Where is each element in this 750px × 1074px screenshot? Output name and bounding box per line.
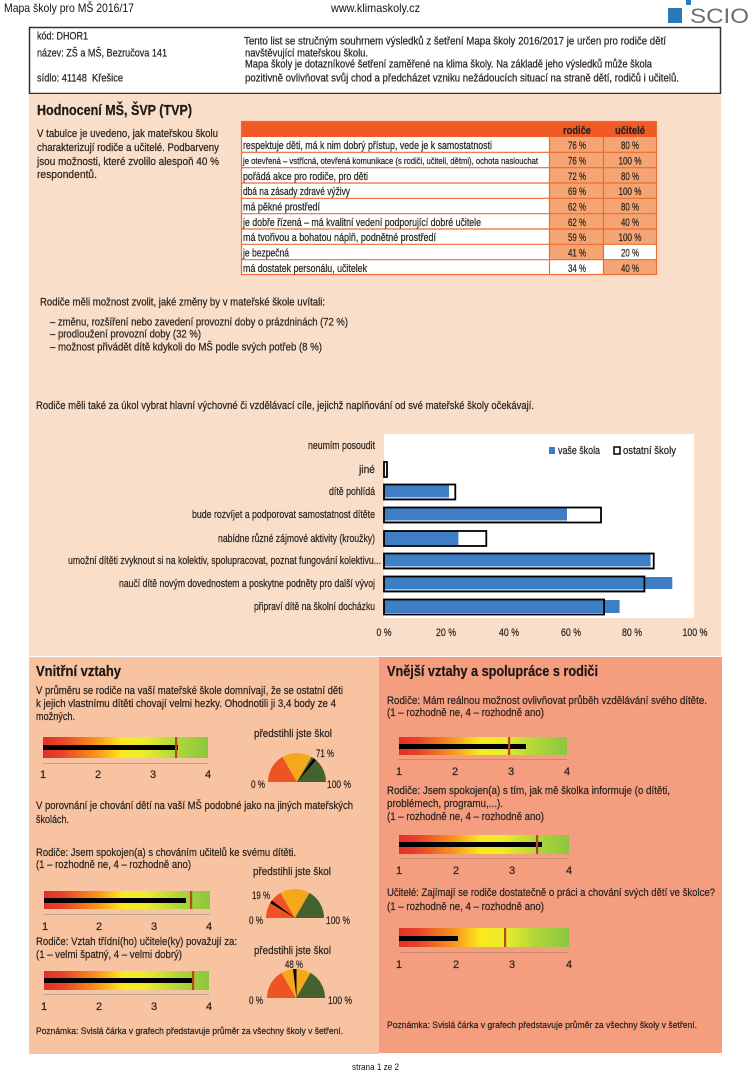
bullet chart: information: 4 xyxy=(566,865,572,877)
gauge: 71 %: předstihli jste škol xyxy=(254,728,332,740)
bullet chart: children's behaviour: 3 xyxy=(150,769,156,781)
bullet chart: teacher behaviour xyxy=(42,891,212,933)
bullet chart: class teacher: 1 xyxy=(41,1001,47,1013)
table: characteristics of the kindergarten: respektuje děti, má k nim dobrý přístup, vede je k samostatnosti xyxy=(243,140,492,152)
table: characteristics of the kindergarten: 80 % xyxy=(621,140,639,152)
gauge: 48 %: 0 % xyxy=(249,995,263,1007)
table: characteristics of the kindergarten: 80 % xyxy=(621,202,639,214)
gauge: 19 %: 100 % xyxy=(326,915,350,927)
table: characteristics of the kindergarten: 34 % xyxy=(568,263,586,275)
text: teachers' question: (1 – rozhodně ne, 4 – rozhodně ano) xyxy=(387,901,544,913)
note: right panel: Poznámka: Svislá čárka v grafech představuje průměr za všechny školy v šetření. xyxy=(387,1020,697,1031)
table: characteristics of the kindergarten: učitelé xyxy=(615,125,645,137)
text: behaviour comparison: školách. xyxy=(36,814,69,826)
text: desired changes: – změnu, rozšíření nebo zavedení provozní doby o prázdninách (72 %) xyxy=(50,316,348,328)
table: characteristics of the kindergarten: má tvořivou a bohatou náplň, podnětné prostředí xyxy=(243,232,436,244)
gauge: 71 %: 0 % xyxy=(251,779,265,791)
bullet chart: information: 2 xyxy=(453,865,459,877)
text: question on teacher behaviour: (1 – rozhodně ne, 4 – rozhodně ano) xyxy=(36,859,191,871)
chart bars: your school xyxy=(384,485,672,613)
gauge: 48 %: 48 % xyxy=(285,959,303,971)
chart category labels: naučí dítě novým dovednostem a poskytne podněty pro další vývoj xyxy=(119,578,375,590)
text: desired changes: – prodloužení provozní doby (32 %) xyxy=(50,328,201,340)
table: characteristics of the kindergarten: 20 % xyxy=(621,248,639,260)
text: desired changes xyxy=(40,296,348,354)
bullet chart: parents' interest: 3 xyxy=(509,959,515,971)
bullet chart: information: 1 xyxy=(396,865,402,877)
text: summary of children's behaviour: k jejich vlastnímu dítěti chovají velmi hezky. Ohodnotili ji 3,4 body ze 4 xyxy=(36,698,336,710)
text: question on information xyxy=(387,785,670,823)
bullet chart: influence: 3 xyxy=(508,766,514,778)
heading: Vnitřní vztahy: Vnitřní vztahy xyxy=(36,663,122,680)
table: characteristics of the kindergarten: 100 % xyxy=(618,186,642,198)
bullet chart: influence xyxy=(396,737,570,778)
text: summary of children's behaviour xyxy=(36,685,343,723)
bullet chart: class teacher xyxy=(41,971,212,1013)
table: characteristics of the kindergarten xyxy=(241,121,657,275)
introductory text: Tento list se stručným souhrnem výsledků z šetření Mapa školy 2016/2017 je určen pro rodiče dětí xyxy=(244,36,666,48)
introductory text xyxy=(244,36,679,84)
chart category labels: dítě pohlídá xyxy=(329,486,376,498)
panel: school information box xyxy=(30,28,720,94)
text: table description xyxy=(36,128,219,181)
table: characteristics of the kindergarten: je dobře řízená – má kvalitní vedení podporující dobré učitele xyxy=(242,217,481,229)
table: characteristics of the kindergarten: má pěkné prostředí xyxy=(243,202,320,214)
text: question on class teacher: Rodiče: Vztah třídní(ho) učitele(ky) považují za: xyxy=(36,936,237,948)
gauge: 19 % xyxy=(249,866,350,927)
chart axis labels: 40 % xyxy=(499,627,519,639)
table: characteristics of the kindergarten: 76 % xyxy=(568,156,586,168)
table: characteristics of the kindergarten: 80 % xyxy=(621,171,639,183)
bullet chart: children's behaviour: 1 xyxy=(40,769,46,781)
footer: page number: strana 1 ze 2 xyxy=(352,1062,399,1072)
panel: external relationships xyxy=(379,657,722,1053)
chart axis labels: 20 % xyxy=(436,627,456,639)
table: characteristics of the kindergarten: 76 % xyxy=(568,140,586,152)
text: question on influence: (1 – rozhodně ne, 4 – rozhodně ano) xyxy=(387,707,544,719)
text: teachers' question xyxy=(387,887,715,913)
panel: internal relationships xyxy=(29,657,379,1054)
header: document title: Mapa školy pro MŠ 2016/17 xyxy=(4,0,134,15)
table: characteristics of the kindergarten: dbá na zásady zdravé výživy xyxy=(243,186,350,198)
heading: Vnější vztahy: Vnější vztahy a spolupráce s rodiči xyxy=(387,663,598,680)
text: desired changes: Rodiče měli možnost zvolit, jaké změny by v mateřské škole uvítali: xyxy=(40,296,325,308)
bullet chart: information: 3 xyxy=(509,865,515,877)
text: question on teacher behaviour: Rodiče: Jsem spokojen(a) s chováním učitelů ke svému dítěti. xyxy=(36,847,296,859)
text: question on information: (1 – rozhodně ne, 4 – rozhodně ano) xyxy=(387,811,544,823)
chart category labels: bude rozvíjet a podporovat samostatnost dítěte xyxy=(192,509,375,521)
text: question on teacher behaviour xyxy=(36,847,296,871)
table: characteristics of the kindergarten: 41 % xyxy=(568,248,586,260)
chart axis labels: 60 % xyxy=(561,627,581,639)
bullet chart: teacher behaviour: 2 xyxy=(96,921,102,933)
table: characteristics of the kindergarten: pořádá akce pro rodiče, pro děti xyxy=(243,171,368,183)
chart bars: other schools xyxy=(384,462,654,614)
text: table description: jsou možnosti, které zvolilo alespoň 40 % xyxy=(36,156,219,168)
school identification: sídlo: 41148 Křešice xyxy=(37,72,123,84)
bullet chart: parents' interest: 2 xyxy=(453,959,459,971)
introductory text: pozitivně ovlivňovat svůj chod a předcházet vzniku nežádoucích situací na straně dětí, rodičů i učitelů. xyxy=(245,72,679,84)
text: question on influence xyxy=(387,695,707,719)
bar chart: educational goals xyxy=(68,434,708,639)
table: characteristics of the kindergarten: je bezpečná xyxy=(242,248,290,260)
text: table description: charakterizují rodiče a učitelé. Podbarveny xyxy=(37,142,219,154)
introductory text: Mapa školy je dotazníkové šetření zaměřené na klima školy. Na základě jeho výsledků může škola xyxy=(245,58,653,70)
bullet chart: teacher behaviour: 4 xyxy=(206,921,212,933)
bullet chart: teacher behaviour: 1 xyxy=(42,921,48,933)
icon: SCIO logo xyxy=(668,0,749,28)
text: desired changes: – možnost přivádět dítě kdykoli do MŠ podle svých potřeb (8 %) xyxy=(50,340,322,354)
gauge: 48 % xyxy=(249,945,352,1007)
chart category labels: umožní dítěti zvyknout si na kolektiv, spolupracovat, poznat fungování kolektivu... xyxy=(68,555,381,567)
table: characteristics of the kindergarten: 40 % xyxy=(621,217,639,229)
table: characteristics of the kindergarten: rodiče xyxy=(563,125,591,137)
text: chart intro: Rodiče měli také za úkol vybrat hlavní výchovné či vzdělávací cíle, jejichž naplňování od své mateřské školy očekávají. xyxy=(36,400,534,412)
gauge: 71 %: 100 % xyxy=(327,779,351,791)
bullet chart: teacher behaviour: 3 xyxy=(151,921,157,933)
bullet chart: information xyxy=(396,835,572,877)
school identification: název: ZŠ a MŠ, Bezručova 141 xyxy=(37,46,167,60)
text: behaviour comparison xyxy=(36,799,353,826)
bullet chart: influence: 4 xyxy=(564,766,570,778)
table: characteristics of the kindergarten: 69 % xyxy=(568,186,586,198)
bullet chart: class teacher: 4 xyxy=(206,1001,212,1013)
table: characteristics of the kindergarten: 72 % xyxy=(568,171,586,183)
panel: evaluation of kindergarten xyxy=(29,94,721,656)
gauge: 19 %: 0 % xyxy=(249,915,263,927)
gauge: 48 %: 100 % xyxy=(328,995,352,1007)
bullet chart: influence: 1 xyxy=(396,766,402,778)
heading: Hodnocení MŠ: Hodnocení MŠ, ŠVP (TVP) xyxy=(37,101,192,119)
table: characteristics of the kindergarten: má dostatek personálu, učitelek xyxy=(243,263,367,275)
chart axis labels xyxy=(376,627,708,639)
gauge: 19 %: předstihli jste škol xyxy=(253,866,331,878)
chart category labels: nabídne různé zájmové aktivity (kroužky) xyxy=(218,533,375,545)
chart axis labels: 0 % xyxy=(376,627,392,639)
chart legend xyxy=(549,445,676,457)
bullet chart: parents' interest: 4 xyxy=(566,959,572,971)
gauge: 71 %: 71 % xyxy=(316,748,334,760)
chart axis labels: 80 % xyxy=(622,627,642,639)
chart axis labels: 100 % xyxy=(682,627,708,639)
table: characteristics of the kindergarten: 59 % xyxy=(568,232,586,244)
table: characteristics of the kindergarten: 62 % xyxy=(568,202,586,214)
text: summary of children's behaviour: možných. xyxy=(36,711,75,723)
header: website: www.klimaskoly.cz xyxy=(330,1,420,15)
bullet chart: children's behaviour xyxy=(40,737,211,781)
gauge: 71 % xyxy=(251,728,351,791)
bullet chart: influence: 2 xyxy=(452,766,458,778)
icon: SCIO logo: SCIO xyxy=(690,5,749,28)
text: summary of children's behaviour: V průměru se rodiče na vaší mateřské škole domnívají, že se ostatní děti xyxy=(36,685,343,697)
chart category labels: připraví dítě na školní docházku xyxy=(254,601,375,613)
text: table description: respondentů. xyxy=(37,169,97,181)
text: question on class teacher xyxy=(36,936,237,961)
gauge: 48 %: předstihli jste škol xyxy=(254,945,331,957)
table: characteristics of the kindergarten: 40 % xyxy=(621,263,639,275)
text: behaviour comparison: V porovnání je chování dětí na vaší MŠ podobné jako na jiných mateřských xyxy=(36,799,353,812)
note: left panel: Poznámka: Svislá čárka v grafech představuje průměr za všechny školy v šetření. xyxy=(36,1026,343,1037)
chart legend: ostatní školy xyxy=(623,445,676,457)
text: question on information: problémech, programu,...). xyxy=(387,798,503,810)
chart category labels: neumím posoudit xyxy=(308,440,375,452)
bullet chart: children's behaviour: 2 xyxy=(95,769,101,781)
bullet chart: class teacher: 2 xyxy=(96,1001,102,1013)
school identification xyxy=(37,30,167,84)
gauge: 19 %: 19 % xyxy=(252,890,270,902)
table: characteristics of the kindergarten: 100 % xyxy=(618,156,642,168)
bullet chart: parents' interest xyxy=(396,928,572,971)
table: characteristics of the kindergarten: 100 % xyxy=(618,232,642,244)
introductory text: navštěvující mateřskou školu. xyxy=(245,48,368,60)
chart category labels: jiné xyxy=(358,464,375,476)
chart category labels xyxy=(68,440,381,613)
bullet chart: parents' interest: 1 xyxy=(396,959,402,971)
bullet chart: children's behaviour: 4 xyxy=(205,769,211,781)
table: characteristics of the kindergarten: 62 % xyxy=(568,217,586,229)
bullet chart: class teacher: 3 xyxy=(151,1001,157,1013)
school identification: kód: DHOR1 xyxy=(37,30,88,42)
table: characteristics of the kindergarten: je otevřená – vstřícná, otevřená komunikace (s rodiči, učiteli, dětmi), ochota naslouchat xyxy=(242,156,538,167)
text: question on information: Rodiče: Jsem spokojen(a) s tím, jak mě školka informuje (o dítěti, xyxy=(387,785,670,797)
text: question on class teacher: (1 – velmi špatný, 4 – velmi dobrý) xyxy=(36,949,182,961)
text: table description: V tabulce je uvedeno, jak mateřskou školu xyxy=(37,128,218,140)
text: question on influence: Rodiče: Mám reálnou možnost ovlivňovat průběh vzdělávání svého dítěte. xyxy=(387,695,707,707)
chart legend: vaše škola xyxy=(558,445,601,457)
